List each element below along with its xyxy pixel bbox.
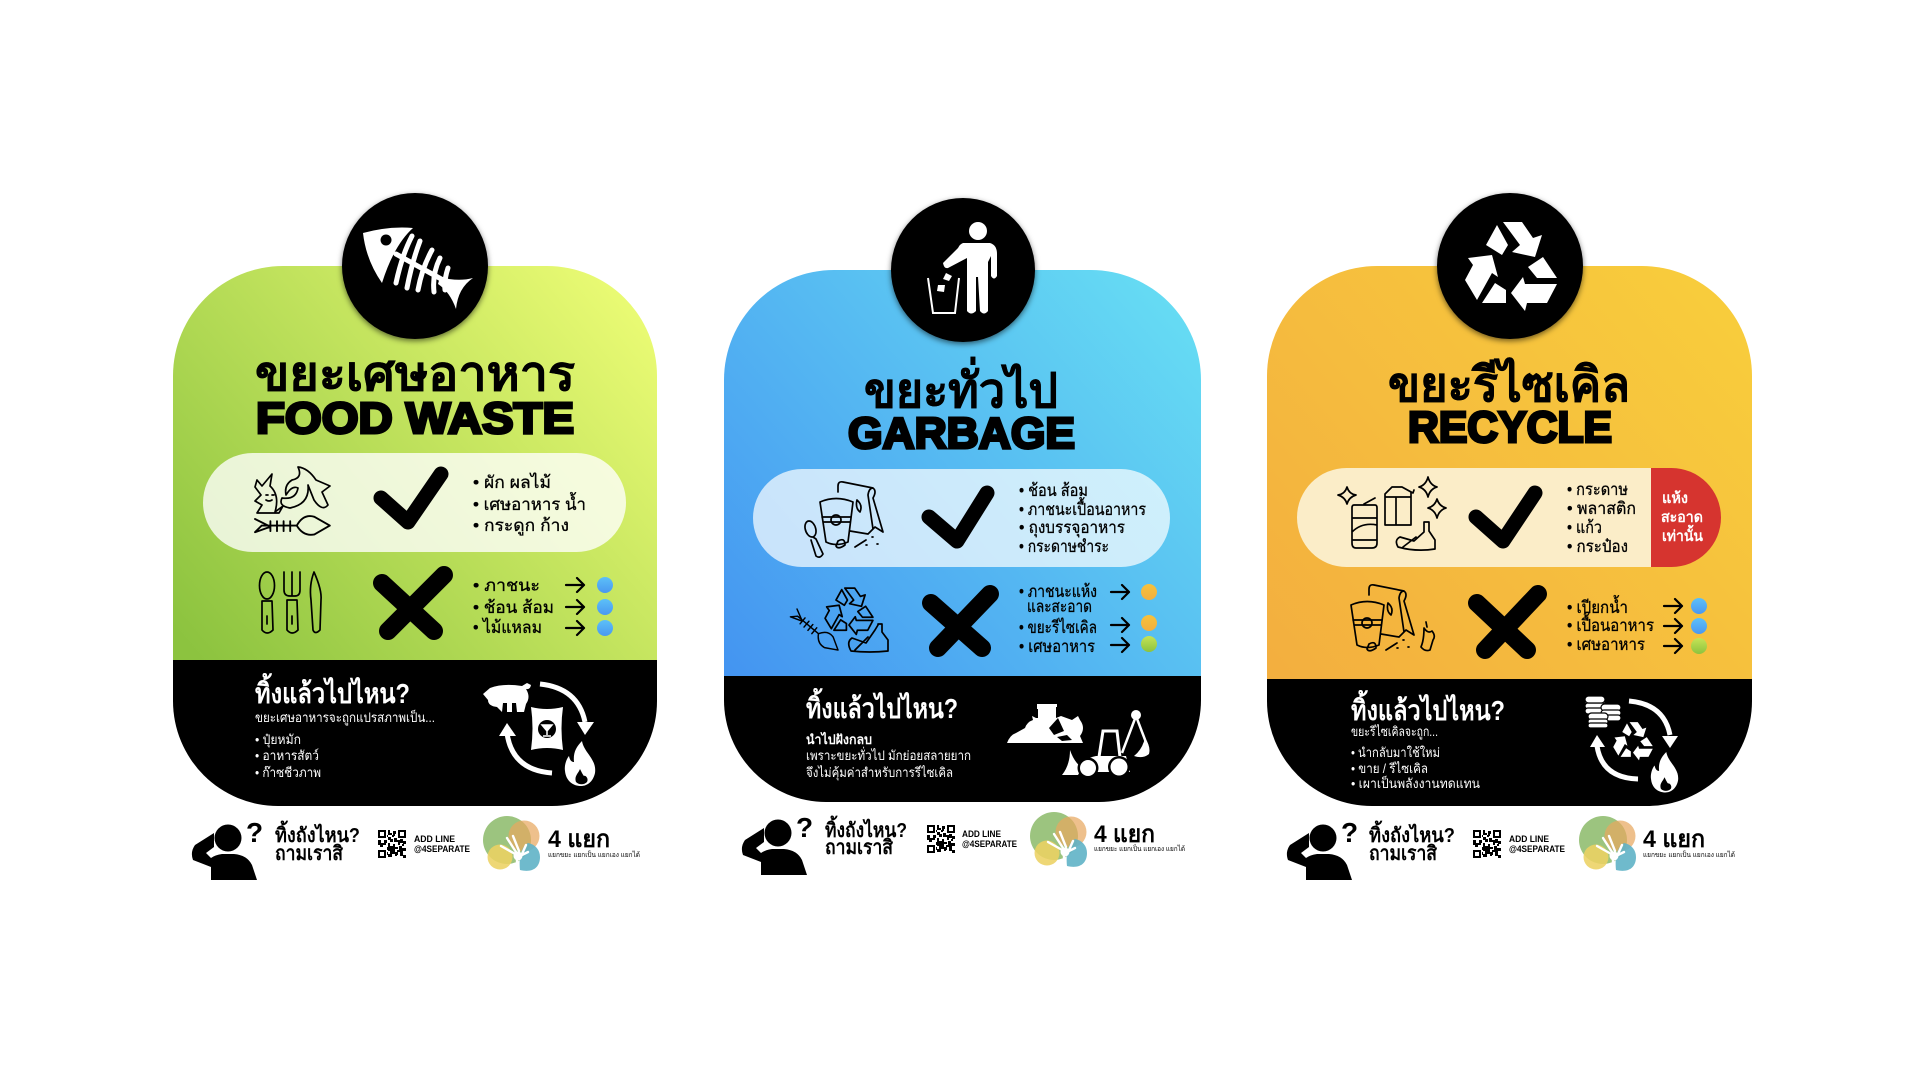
- rejected list: • เศษอาหาร: [1567, 635, 1645, 654]
- text: add line: [414, 834, 470, 854]
- qr code: [927, 825, 955, 853]
- text: which bin: ทิ้งถังไหน?: [1369, 820, 1455, 847]
- logo text: แยกขยะ แยกเป็น แยกเอง แยกได้: [1094, 844, 1185, 853]
- accepted list: • กระป๋อง: [1567, 537, 1628, 556]
- accepted list: • ถุงบรรจุอาหาร: [1019, 518, 1125, 538]
- rejected list: • เปื้อนอาหาร: [1567, 613, 1654, 635]
- panel: recycle: [1267, 193, 1752, 880]
- badge: person throwing trash: [891, 198, 1035, 342]
- accepted list: [473, 472, 586, 536]
- logo text: [1643, 826, 1735, 859]
- icon: recycling fish bottle: [789, 588, 888, 655]
- qr code: [378, 830, 406, 858]
- panel footer: black: [724, 676, 1201, 802]
- text: add line: @4SEPARATE: [1509, 844, 1565, 854]
- text: add line: ADD LINE: [962, 829, 1001, 839]
- icon: thinking person: [1287, 824, 1352, 880]
- rejected list: [473, 576, 613, 637]
- icon: cutlery: [260, 572, 321, 633]
- rejected list: และสะอาด: [1027, 597, 1092, 616]
- logo text: 4 แยก: [1094, 821, 1155, 848]
- panel: garbage: [724, 198, 1201, 875]
- text: add line: ADD LINE: [1509, 834, 1549, 844]
- title: thai: ขยะทั่วไป: [864, 356, 1058, 418]
- logo mark: [1579, 816, 1636, 871]
- title: english: FOOD WASTE: [256, 394, 574, 443]
- panel footer: black: [1267, 679, 1752, 806]
- pill: accepted: [203, 453, 626, 552]
- icon: peel banana fish: [255, 467, 330, 535]
- rejected list: • เศษอาหาร: [1019, 637, 1095, 656]
- logo text: 4 แยก: [1643, 826, 1705, 853]
- rejected list: [1567, 595, 1707, 654]
- text: add line: @4SEPARATE: [414, 844, 470, 854]
- text: destination: ขยะรีไซเคิลจะถูก...: [1351, 724, 1438, 740]
- text: destination: นำไปฝังกลบ: [806, 731, 872, 747]
- text: which bin: ทิ้งถังไหน?: [825, 815, 907, 842]
- text: destination: [255, 708, 435, 780]
- panel background: yellow: [1267, 266, 1752, 679]
- heading: where it goes: ทิ้งแล้วไปไหน?: [1351, 689, 1505, 726]
- icon: cross: [931, 594, 990, 648]
- text: which bin: [1369, 820, 1455, 865]
- note: dry and clean only: [1651, 468, 1721, 567]
- accepted list: • กระดาษชำระ: [1019, 537, 1109, 556]
- accepted list: • ภาชนะเปื้อนอาหาร: [1019, 497, 1146, 519]
- accepted list: • กระดูก ก้าง: [473, 516, 569, 536]
- text: destination: ขยะเศษอาหารจะถูกแปรสภาพเป็น...: [255, 708, 435, 726]
- text: destination: • เผาเป็นพลังงานทดแทน: [1351, 774, 1480, 791]
- icon: check: [1476, 493, 1535, 541]
- icon: cross: [1477, 594, 1538, 650]
- accepted list: • แก้ว: [1567, 518, 1602, 537]
- icon: thinking person: [742, 820, 807, 875]
- text: destination: • ปุ๋ยหมัก: [255, 732, 301, 748]
- text: destination: เพราะขยะทั่วไป มักย่อยสลายยาก: [806, 747, 971, 763]
- rejected list: • ช้อน ส้อม: [473, 598, 554, 617]
- logo text: แยกขยะ แยกเป็น แยกเอง แยกได้: [1643, 850, 1735, 859]
- icon: question mark: ?: [796, 812, 813, 843]
- icon: check: [929, 493, 987, 541]
- title: english: GARBAGE: [848, 409, 1075, 458]
- note: dry and clean only: สะอาด: [1661, 509, 1703, 526]
- logo text: แยกขยะ แยกเป็น แยกเอง แยกได้: [548, 850, 640, 859]
- panel background: green: [173, 266, 657, 660]
- text: add line: [962, 829, 1017, 849]
- icon: cup bag spoon: [805, 482, 883, 557]
- accepted list: • ผัก ผลไม้: [473, 472, 551, 492]
- icon: question mark: ?: [246, 817, 263, 848]
- qr code: [1473, 830, 1501, 858]
- icon: thinking person: [192, 824, 257, 880]
- text: which bin: ทิ้งถังไหน?: [275, 820, 360, 847]
- text: which bin: ถามเราสิ: [1369, 843, 1438, 865]
- panel background: blue: [724, 270, 1201, 676]
- panel footer: black: [173, 660, 657, 806]
- rejected list: • ภาชนะแห้ง: [1019, 582, 1097, 601]
- logo mark: [1030, 812, 1087, 867]
- text: destination: [1351, 724, 1480, 791]
- logo mark: [483, 816, 540, 871]
- text: which bin: ถามเราสิ: [275, 843, 344, 865]
- title: english: RECYCLE: [1408, 403, 1612, 452]
- rejected list: [1019, 582, 1157, 656]
- footer: ask us: [1287, 816, 1735, 880]
- logo text: 4 แยก: [548, 826, 610, 853]
- icon: coins recycle cycle: [1585, 696, 1678, 792]
- rejected list: • ภาชนะ: [473, 576, 540, 595]
- logo text: [1094, 821, 1185, 853]
- icon: pig compost cycle: [483, 683, 595, 786]
- icon: check: [381, 474, 441, 522]
- logo text: [548, 826, 640, 859]
- title: thai: ขยะรีไซเคิล: [1388, 356, 1630, 412]
- text: add line: ADD LINE: [414, 834, 455, 844]
- text: destination: • ขาย / รีไซเคิล: [1351, 761, 1428, 776]
- icon: can carton bottle sparkle: [1338, 477, 1446, 550]
- text: which bin: [825, 815, 907, 859]
- note: dry and clean only: แห้ง: [1662, 490, 1688, 507]
- accepted list: [1019, 481, 1146, 556]
- rejected list: • ไม้แหลม: [473, 617, 542, 637]
- icon: cross: [382, 575, 444, 631]
- pill: accepted: [753, 469, 1170, 567]
- icon: question mark: ?: [1341, 817, 1358, 848]
- text: which bin: ถามเราสิ: [825, 837, 894, 859]
- icon: cup bag apple core: [1351, 585, 1434, 651]
- title: thai: ขยะเศษอาหาร: [255, 348, 575, 401]
- heading: where it goes: ทิ้งแล้วไปไหน?: [255, 672, 410, 709]
- pill: accepted: [1297, 468, 1721, 567]
- text: destination: [806, 731, 971, 781]
- accepted list: • เศษอาหาร น้ำ: [473, 492, 586, 514]
- text: which bin: [275, 820, 360, 865]
- accepted list: • กระดาษ: [1567, 480, 1628, 499]
- text: destination: จึงไม่คุ้มค่าสำหรับการรีไซเคิล: [806, 765, 953, 781]
- panel: food waste: [173, 193, 657, 880]
- accepted list: • พลาสติก: [1567, 499, 1636, 518]
- accepted list: [1567, 480, 1636, 556]
- text: add line: @4SEPARATE: [962, 839, 1017, 849]
- footer: ask us: [192, 816, 640, 880]
- icon: landfill bulldozer backhoe: [1007, 704, 1150, 778]
- text: destination: • ก๊าซชีวภาพ: [255, 765, 321, 780]
- text: destination: • นำกลับมาใช้ใหม่: [1351, 745, 1440, 760]
- text: add line: [1509, 834, 1565, 854]
- badge: recycling symbol: [1437, 193, 1583, 339]
- footer: ask us: [742, 812, 1185, 875]
- text: destination: • อาหารสัตว์: [255, 748, 319, 763]
- accepted list: • ช้อน ส้อม: [1019, 481, 1088, 500]
- badge: fish bone: [342, 193, 488, 339]
- rejected list: • เปียกน้ำ: [1567, 595, 1628, 617]
- rejected list: • ขยะรีไซเคิล: [1019, 617, 1097, 637]
- note: dry and clean only: เท่านั้น: [1662, 524, 1704, 545]
- heading: where it goes: ทิ้งแล้วไปไหน?: [806, 687, 958, 724]
